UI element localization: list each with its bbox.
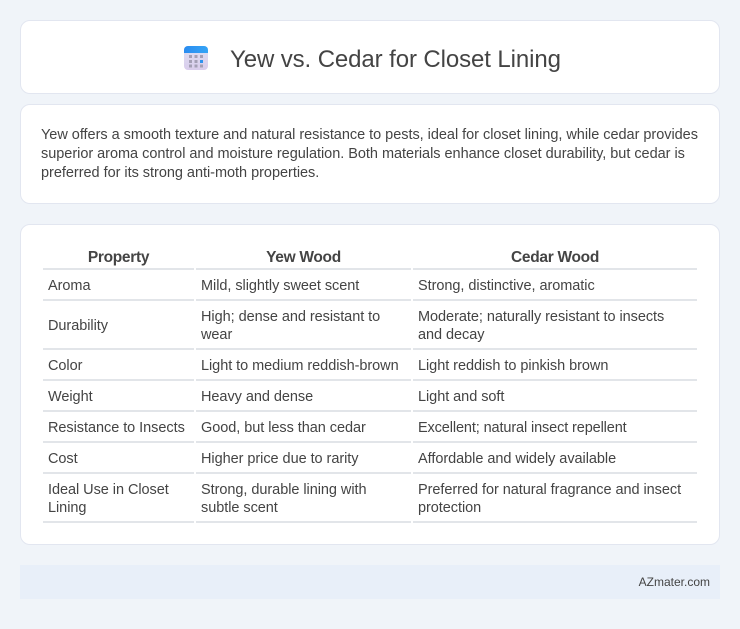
row: aroma: Mild, slightly sweet scent [201, 278, 359, 294]
table header [43, 249, 697, 270]
row: color: Light reddish to pinkish brown [418, 358, 608, 374]
row: weight: Heavy and dense [201, 389, 313, 405]
icon: calendar [184, 46, 208, 70]
row: cost [43, 451, 697, 474]
row: weight: Light and soft [418, 389, 504, 405]
row: ideal use in closet lining: Strong, durable lining with [201, 482, 366, 498]
row: resistance to insects [43, 420, 697, 443]
panel: comparison table [20, 224, 720, 545]
row: durability: and decay [418, 327, 484, 343]
row: resistance to insects: Excellent; natural insect repellent [418, 420, 627, 436]
footer source label: AZmater.com [639, 575, 710, 589]
panel: title card [20, 20, 720, 94]
row: resistance to insects: Good, but less than cedar [201, 420, 366, 436]
row: color: Light to medium reddish-brown [201, 358, 399, 374]
row: aroma [43, 278, 697, 301]
title: Yew vs. Cedar for Closet Lining [230, 46, 561, 73]
row: ideal use in closet lining: Ideal Use in Closet [48, 482, 169, 498]
summary text: superior aroma control and moisture regulation. Both materials enhance closet durability, but cedar is [41, 146, 685, 162]
table header: Yew Wood [266, 249, 341, 266]
row: ideal use in closet lining: Preferred for natural fragrance and insect [418, 482, 681, 498]
row: resistance to insects: Resistance to Insects [48, 420, 185, 436]
row: cost: Higher price due to rarity [201, 451, 358, 467]
panel: summary [20, 104, 720, 204]
row: durability [43, 309, 697, 350]
row: cost: Cost [48, 451, 78, 467]
row: durability: wear [201, 327, 232, 343]
row: ideal use in closet lining: protection [418, 500, 481, 516]
row: aroma: Strong, distinctive, aromatic [418, 278, 595, 294]
row: durability: High; dense and resistant to [201, 309, 380, 325]
table header: Cedar Wood [511, 249, 599, 266]
row: weight [43, 389, 697, 412]
row: color [43, 358, 697, 381]
row: ideal use in closet lining [43, 482, 697, 523]
row: cost: Affordable and widely available [418, 451, 616, 467]
summary text [41, 127, 698, 181]
row: ideal use in closet lining: Lining [48, 500, 86, 516]
row: color: Color [48, 358, 82, 374]
footer bar [20, 565, 720, 599]
row: weight: Weight [48, 389, 93, 405]
table header: Property [88, 249, 149, 266]
row: ideal use in closet lining: subtle scent [201, 500, 278, 516]
row: durability: Durability [48, 318, 108, 334]
summary text: preferred for its strong anti-moth properties. [41, 165, 319, 181]
row: aroma: Aroma [48, 278, 90, 294]
row: durability: Moderate; naturally resistant to insects [418, 309, 664, 325]
summary text: Yew offers a smooth texture and natural resistance to pests, ideal for closet lining, while cedar provides [41, 127, 698, 143]
